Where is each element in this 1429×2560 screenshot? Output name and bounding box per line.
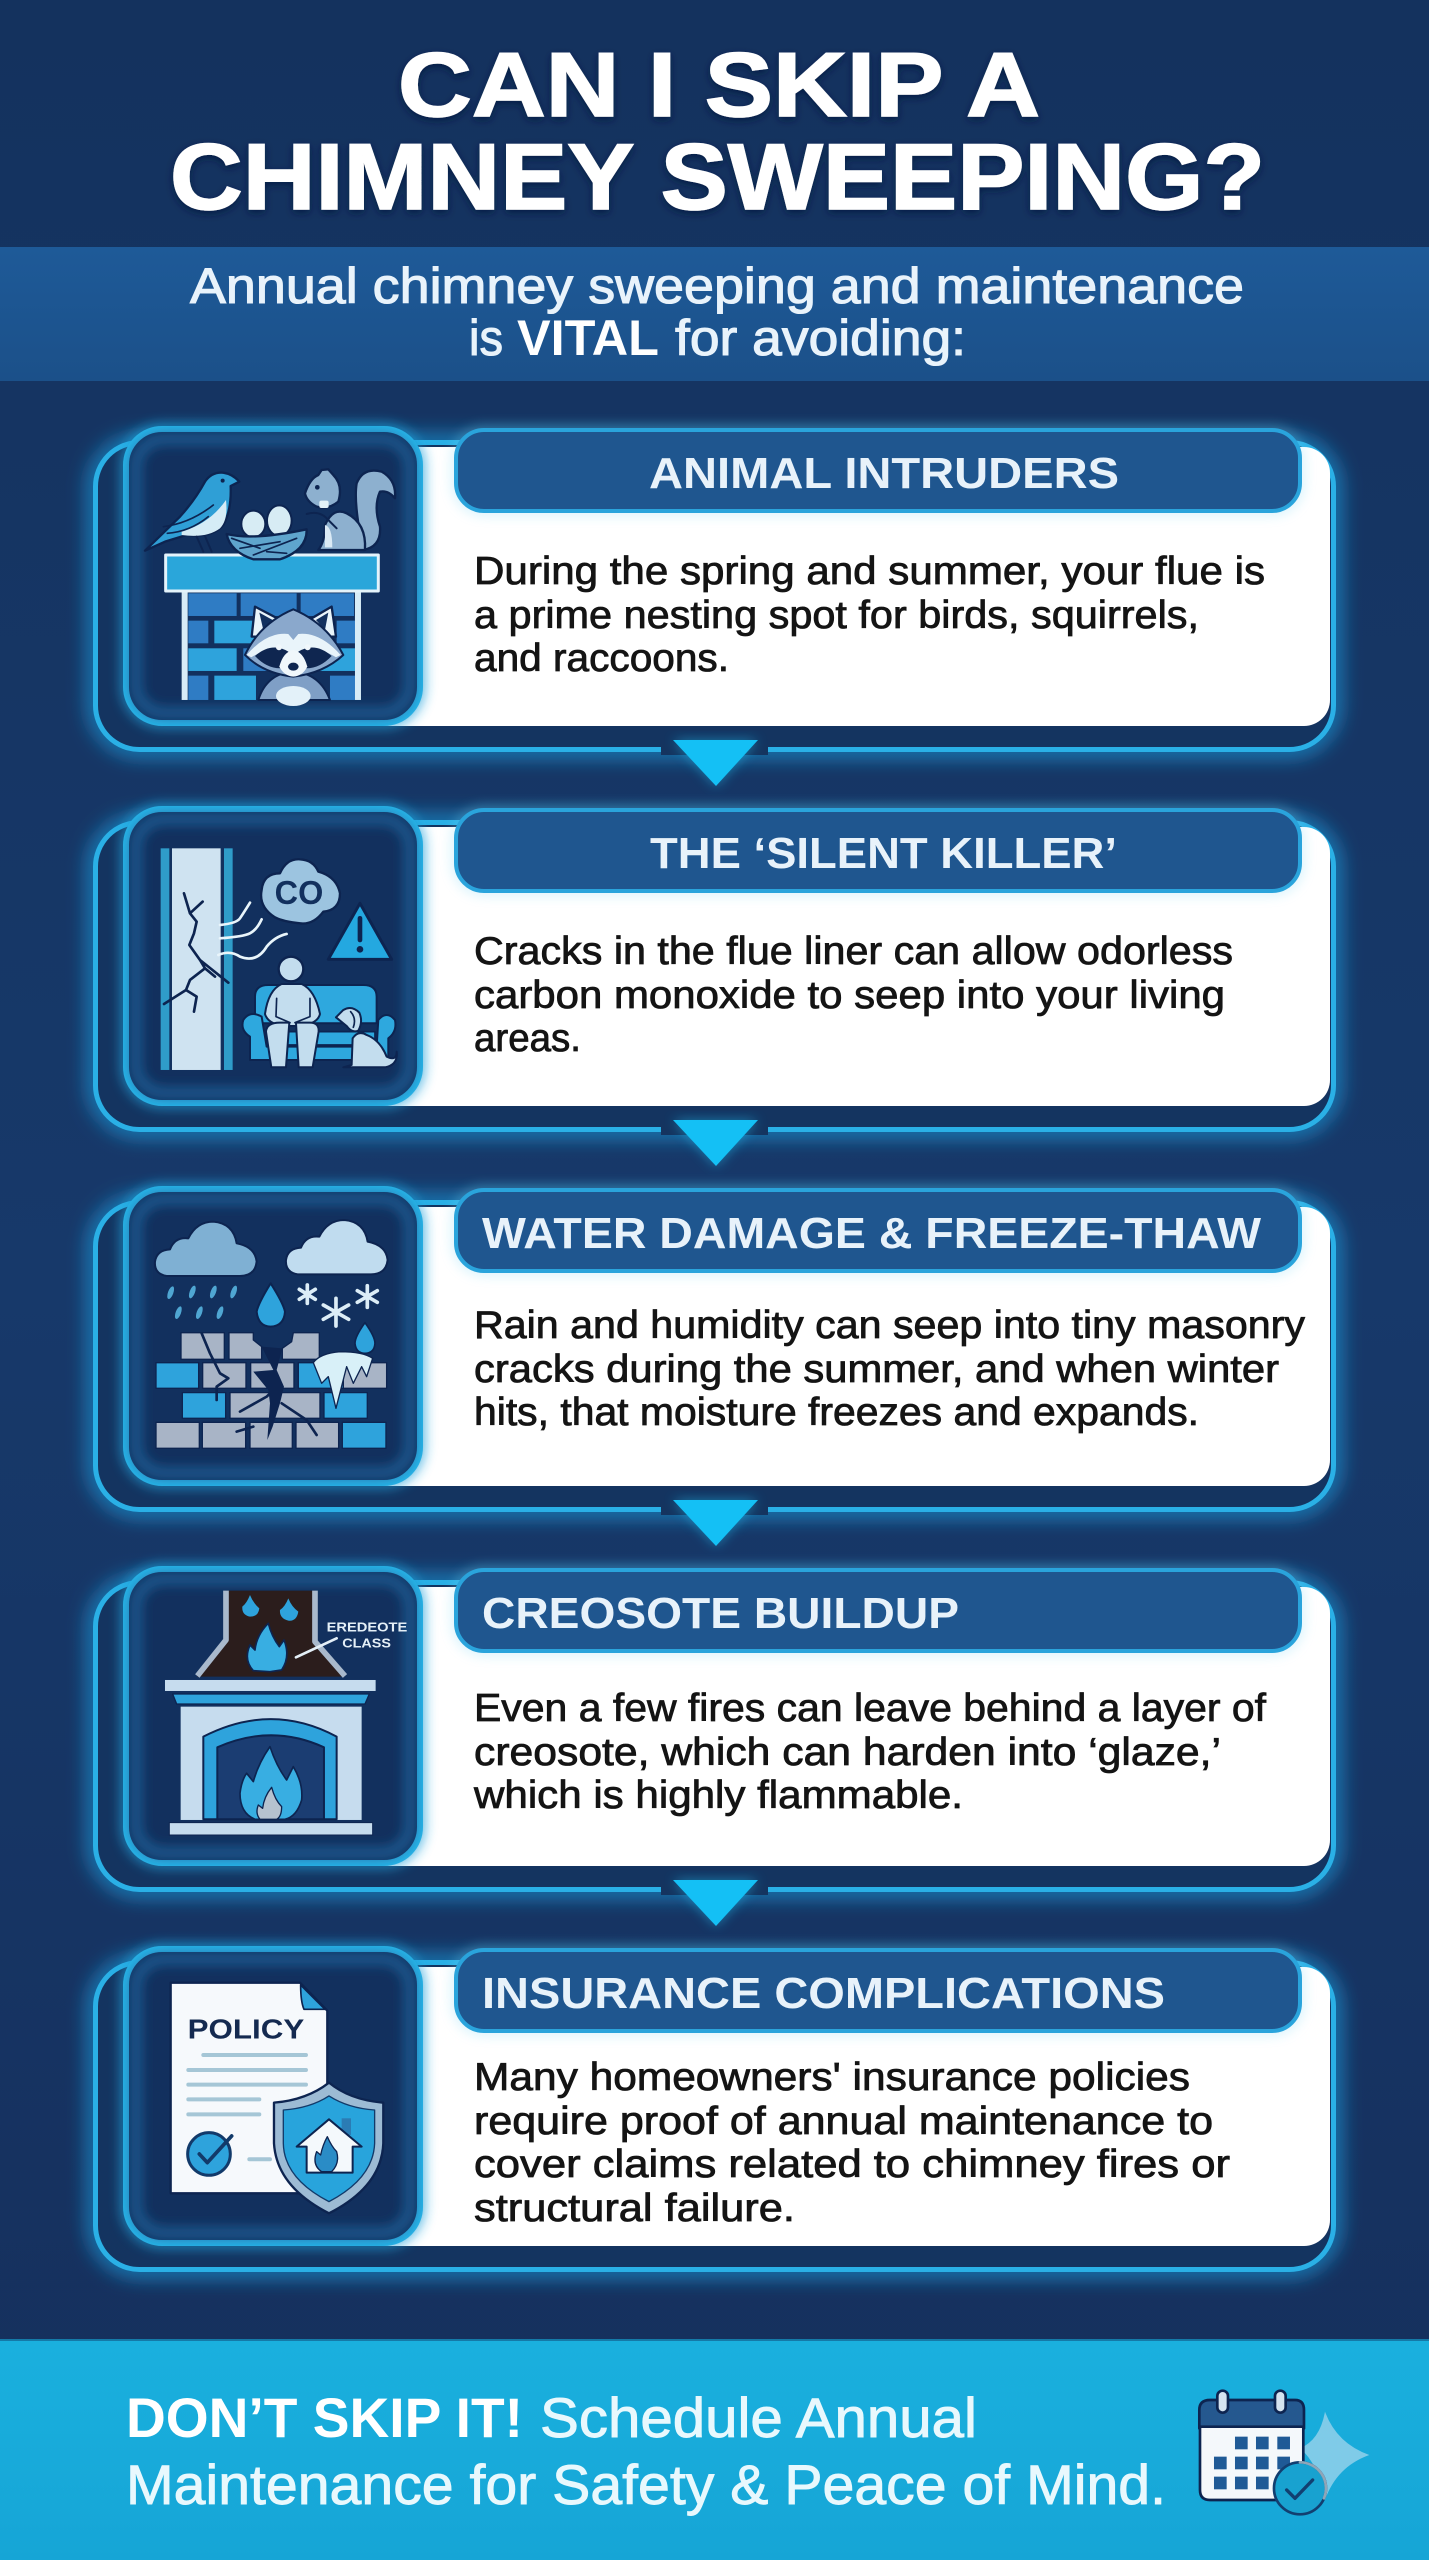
text: animal intruders (474, 550, 1265, 680)
footer banner (0, 2339, 1429, 2560)
icon: rain, snow and cracked brick wall (155, 1220, 388, 1448)
subtitle band: is (469, 310, 503, 366)
text: the silent killer: carbon monoxide to seep into your living (474, 974, 1225, 1017)
call to action text (126, 2386, 1166, 2516)
text: creosote buildup: creosote, which can harden into ‘glaze,’ (474, 1731, 1221, 1774)
text: insurance complications (474, 2056, 1230, 2230)
text: insurance complications: cover claims related to chimney fires or (474, 2143, 1230, 2186)
title: CAN I SKIP A (398, 35, 1040, 136)
icon: cracked flue, carbon monoxide and family: CO (275, 875, 323, 912)
call to action text: Schedule Annual (540, 2386, 977, 2449)
text: water damage (474, 1304, 1306, 1434)
panel: insurance complications (96, 1949, 1334, 2270)
text: the silent killer: Cracks in the flue liner can allow odorless (474, 930, 1233, 973)
text: creosote buildup: which is highly flammable. (473, 1774, 963, 1817)
text: insurance complications: structural failure. (474, 2187, 795, 2230)
text: insurance complications: Many homeowners' insurance policies (474, 2056, 1190, 2099)
arrow 3 (673, 1500, 758, 1546)
heading: the silent killer: THE ‘SILENT KILLER’ (650, 829, 1117, 878)
text: the silent killer: areas. (474, 1017, 581, 1060)
panel: animal intruders (96, 429, 1334, 755)
text: animal intruders: a prime nesting spot for birds, squirrels, (474, 594, 1199, 637)
heading: insurance complications: INSURANCE COMPLICATIONS (482, 1969, 1165, 2018)
title: CHIMNEY SWEEPING? (170, 124, 1265, 229)
text: water damage: Rain and humidity can seep into tiny masonry (474, 1304, 1306, 1347)
text: creosote buildup (473, 1687, 1266, 1817)
panel: water damage (96, 1189, 1334, 1515)
icon: fireplace with creosote flames (165, 1591, 407, 1835)
subtitle band: Annual chimney sweeping and maintenance (190, 258, 1244, 314)
icon: insurance policy and shield: POLICY (188, 2013, 305, 2044)
panel: silent killer (96, 809, 1334, 1135)
icon: insurance policy and shield (171, 1983, 383, 2213)
arrow 4 (673, 1880, 758, 1926)
text: insurance complications: require proof of annual maintenance to (474, 2100, 1213, 2143)
panel: creosote buildup (96, 1569, 1334, 1895)
arrow 2 (673, 1120, 758, 1166)
text: water damage: hits, that moisture freezes and expands. (474, 1391, 1199, 1434)
call to action text: Maintenance for Safety & Peace of Mind. (126, 2453, 1166, 2516)
call to action text: DON’T SKIP IT! (126, 2386, 523, 2449)
subtitle band: for avoiding: (675, 310, 966, 366)
text: the silent killer (474, 930, 1233, 1060)
subtitle band (0, 247, 1429, 381)
subtitle band: VITAL (517, 310, 659, 366)
arrow 1 (673, 740, 758, 786)
icon: fireplace with creosote flames: CLASS (342, 1635, 391, 1650)
heading: animal intruders: ANIMAL INTRUDERS (649, 449, 1119, 498)
title (170, 35, 1265, 229)
heading: creosote buildup: CREOSOTE BUILDUP (482, 1589, 959, 1638)
text: water damage: cracks during the summer, and when winter (474, 1348, 1279, 1391)
text: animal intruders: During the spring and summer, your flue is (474, 550, 1265, 593)
icon: bird, squirrel and raccoon at chimney (145, 469, 395, 706)
text: animal intruders: and raccoons. (474, 637, 729, 680)
icon: calendar with check and sparkle (1199, 2391, 1369, 2514)
heading: water damage and freeze-thaw: WATER DAMAGE & FREEZE-THAW (482, 1209, 1261, 1258)
icon: fireplace with creosote flames: EREDEOTE (327, 1619, 407, 1634)
text: creosote buildup: Even a few fires can leave behind a layer of (474, 1687, 1266, 1730)
icon: cracked flue, carbon monoxide and family (161, 848, 397, 1070)
